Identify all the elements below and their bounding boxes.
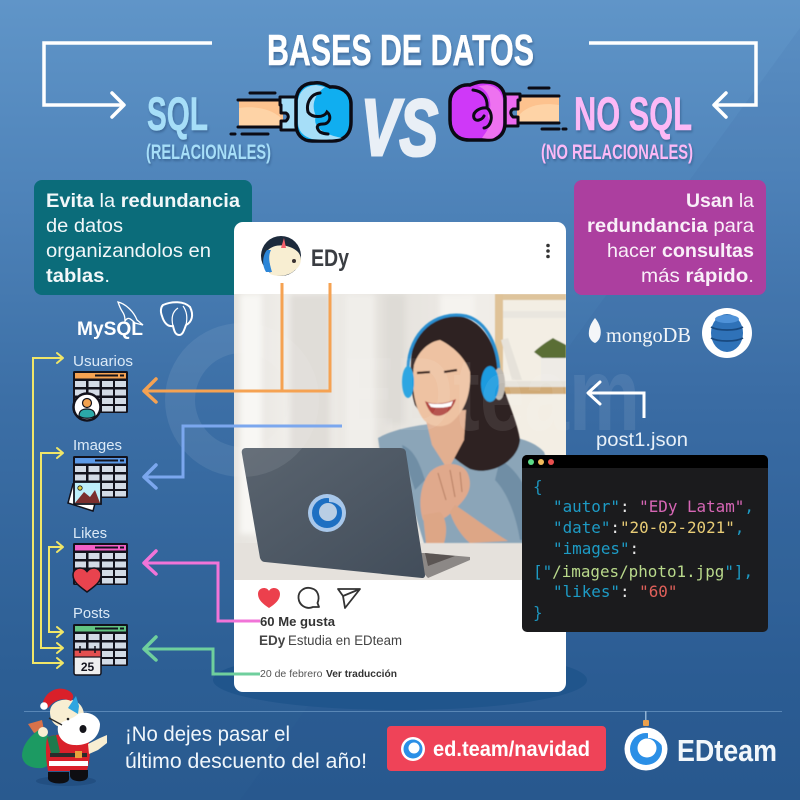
heading: NO SQL: NO SQL: [574, 87, 692, 140]
code text: "likes": "60": [553, 582, 677, 601]
text: NoSQL description: Usan la: [686, 190, 754, 212]
text: SQL description: [46, 190, 240, 287]
table links: yellow connectors: [33, 353, 63, 668]
watermark: [165, 323, 640, 477]
heading: SQL: (RELACIONALES): [146, 141, 271, 164]
text: SQL description: de datos: [46, 215, 123, 237]
code text: "date":"20-02-2021",: [553, 518, 744, 537]
laptop: [242, 448, 470, 578]
text: NoSQL description: más rápido.: [641, 265, 754, 287]
text: NoSQL description: [587, 190, 754, 287]
shadow under post card: [213, 650, 587, 710]
panel: SQL description: [34, 180, 252, 295]
arrow: avatar and name to Usuarios table: [144, 283, 330, 402]
woman: [378, 315, 553, 543]
photo: woman with laptop: [234, 294, 566, 583]
text: caption: EDy: [259, 633, 286, 648]
arrow: left bracket to SQL: [44, 43, 212, 117]
footer divider: [24, 711, 782, 712]
heading: SQL: [146, 87, 271, 164]
logo: EDteam ornament: [624, 711, 777, 770]
code text: ["/images/photo1.jpg"],: [533, 562, 753, 581]
icon: heart: [258, 588, 280, 608]
icon: MySQL logo: MySQL: [77, 319, 143, 340]
heading: SQL: SQL: [147, 87, 208, 140]
text: SQL description: tablas.: [46, 265, 110, 287]
text: NoSQL description: hacer consultas: [607, 240, 754, 262]
text: footer message: último descuento del año!: [125, 750, 367, 773]
text: date: 20 de febrero: [260, 668, 322, 680]
icon: send: [338, 589, 360, 608]
text: likes count: 60 Me gusta: [260, 614, 336, 629]
code text: {: [533, 477, 543, 496]
icon: purple boxing glove: [450, 82, 566, 140]
heading: NO SQL: (NO RELACIONALES): [541, 141, 693, 164]
panel: JSON code window: [522, 455, 768, 632]
username: EDy: [311, 245, 350, 272]
logo: EDteam ornament: EDteam: [677, 733, 777, 768]
arrow: right bracket to NoSQL: [589, 43, 756, 117]
panel: post card: [234, 222, 566, 692]
panel: NoSQL description: [574, 180, 766, 295]
icon: menu dots: [546, 244, 550, 258]
icon: EDteam mark small: [401, 737, 425, 761]
arrow: to post1.json: [588, 382, 644, 418]
code text: [533, 477, 754, 622]
text: NoSQL description: redundancia para: [587, 215, 754, 237]
table: Images: [68, 437, 128, 511]
table: Posts: [73, 605, 128, 675]
icon: PostgreSQL elephant: [161, 302, 192, 335]
icon: mongoDB logo: mongoDB: [606, 323, 691, 347]
table: Likes: Likes: [73, 525, 107, 542]
text: date: Ver traducción: [326, 668, 397, 680]
bookshelf: [494, 294, 566, 395]
table: Images: Images: [73, 437, 122, 454]
text: SQL description: Evita la redundancia: [46, 190, 240, 212]
icon: mongoDB logo: [589, 318, 691, 347]
table: Posts: Posts: [73, 605, 110, 622]
title: BASES DE DATOS: [267, 26, 534, 75]
watermark: EDteam: [342, 337, 640, 453]
code text: }: [533, 603, 543, 622]
text: footer message: ¡No dejes pasar el: [125, 723, 290, 746]
text: caption: Estudia en EDteam: [288, 633, 402, 648]
icon: DynamoDB logo: [702, 308, 752, 358]
icon: VS lettering: VS: [361, 83, 438, 172]
arrow: date to Posts table: [144, 637, 260, 674]
table: Usuarios: [73, 353, 133, 420]
character: Santa unicorn: [22, 689, 107, 786]
table: Likes: [73, 525, 128, 592]
code text: "images":: [553, 539, 639, 558]
table: Posts: 25: [81, 660, 94, 674]
code text: "autor": "EDy Latam",: [553, 497, 754, 516]
arrow: photo to Images table: [144, 426, 342, 488]
text: file name: post1.json: [596, 429, 688, 451]
icon: blue boxing glove: [231, 83, 351, 141]
icon: comment bubble: [298, 588, 319, 608]
table: Usuarios: Usuarios: [73, 353, 133, 370]
avatar: [261, 236, 301, 276]
text: SQL description: organizandolos en: [46, 240, 211, 262]
button: discount link: [387, 726, 606, 771]
text: footer message: [125, 723, 367, 773]
window buttons: [528, 459, 554, 465]
heading: NO SQL: [541, 87, 693, 164]
button: discount link: ed.team/navidad: [433, 738, 590, 761]
table: [264, 543, 522, 580]
arrow: likes to Likes table: [144, 551, 260, 621]
icon: MySQL logo: [77, 302, 143, 340]
